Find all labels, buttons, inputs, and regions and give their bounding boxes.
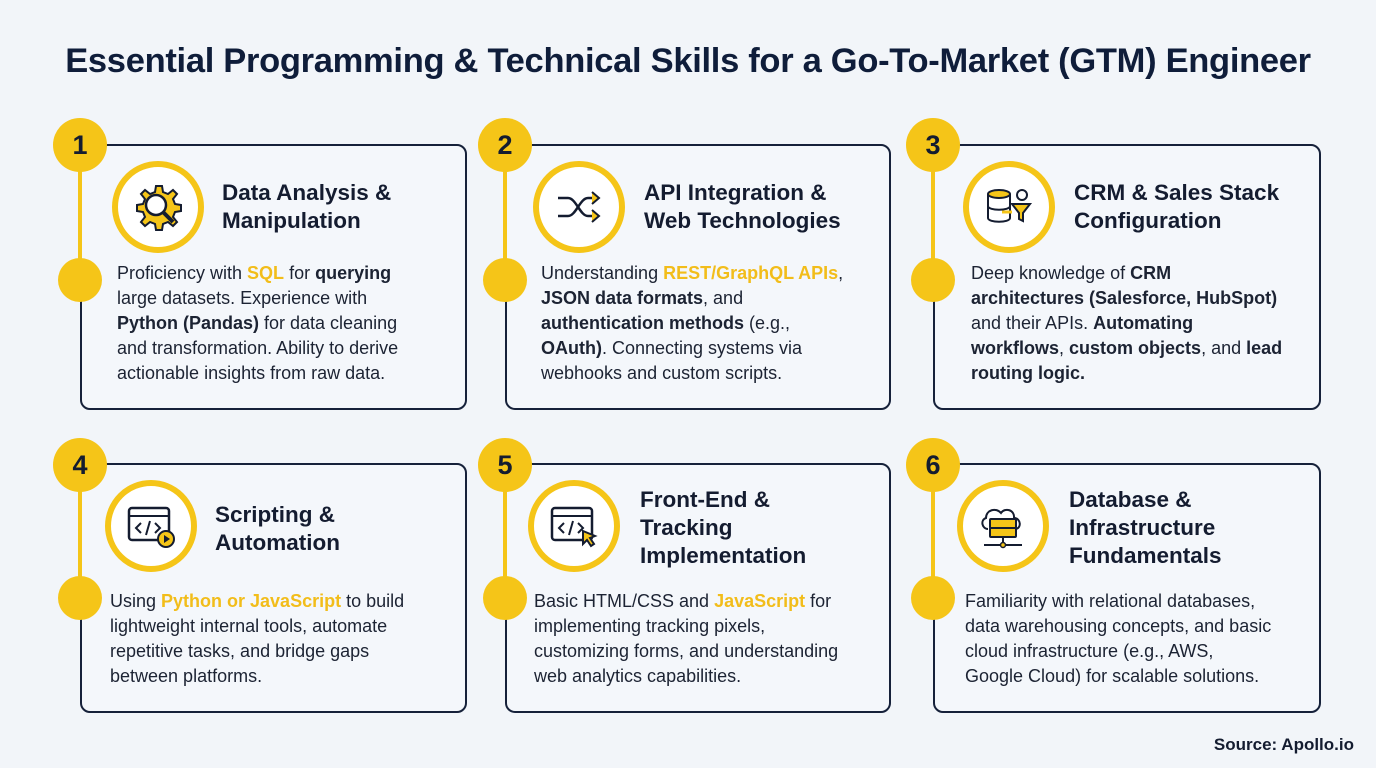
heading: Automation: [215, 530, 340, 555]
text: and transformation. Ability to derive: [117, 338, 398, 358]
number 4: 4: [72, 450, 88, 480]
text: [534, 591, 838, 686]
heading: [640, 487, 806, 568]
heading: Tracking: [640, 515, 733, 540]
heading: CRM & Sales Stack: [1074, 180, 1279, 205]
heading: API Integration &: [644, 180, 827, 205]
text: Google Cloud) for scalable solutions.: [965, 666, 1259, 686]
icon: cloud server: [957, 480, 1049, 572]
text: [971, 263, 1282, 383]
text: routing logic.: [971, 363, 1085, 383]
heading: [222, 180, 391, 233]
heading: Manipulation: [222, 208, 361, 233]
number 2: 2: [497, 130, 513, 160]
text: webhooks and custom scripts.: [541, 363, 782, 383]
source: Source: Apollo.io: [1214, 735, 1354, 754]
text: authentication methods (e.g.,: [541, 313, 790, 333]
text: Proficiency with SQL for querying: [117, 263, 391, 283]
heading: Web Technologies: [644, 208, 841, 233]
text: [110, 591, 404, 686]
heading: Configuration: [1074, 208, 1221, 233]
heading: [1069, 487, 1222, 568]
heading: [644, 180, 841, 233]
heading: Front-End &: [640, 487, 770, 512]
text: large datasets. Experience with: [117, 288, 367, 308]
title: Essential Programming & Technical Skills for a Go-To-Market (GTM) Engineer: [65, 42, 1311, 80]
text: lightweight internal tools, automate: [110, 616, 387, 636]
icon: gear magnifier: [112, 161, 204, 253]
text: [541, 263, 843, 383]
heading: [215, 502, 340, 555]
text: and their APIs. Automating: [971, 313, 1193, 333]
heading: Infrastructure: [1069, 515, 1215, 540]
text: Using Python or JavaScript to build: [110, 591, 404, 611]
text: repetitive tasks, and bridge gaps: [110, 641, 369, 661]
text: OAuth). Connecting systems via: [541, 338, 802, 358]
text: customizing forms, and understanding: [534, 641, 838, 661]
number 5: [478, 438, 532, 492]
text: Deep knowledge of CRM: [971, 263, 1171, 283]
heading: Scripting &: [215, 502, 335, 527]
heading: Implementation: [640, 543, 806, 568]
text: cloud infrastructure (e.g., AWS,: [965, 641, 1213, 661]
number 1: [53, 118, 107, 172]
text: Basic HTML/CSS and JavaScript for: [534, 591, 831, 611]
heading: Data Analysis &: [222, 180, 391, 205]
icon: shuffle arrows: [533, 161, 625, 253]
panel: card 6: [906, 438, 1321, 713]
text: Understanding REST/GraphQL APIs,: [541, 263, 843, 283]
text: [965, 591, 1271, 686]
panel: card 2: [478, 118, 891, 410]
panel: card 4: [53, 438, 467, 713]
number 3: 3: [925, 130, 941, 160]
text: between platforms.: [110, 666, 262, 686]
text: Familiarity with relational databases,: [965, 591, 1255, 611]
number 5: 5: [497, 450, 513, 480]
text: actionable insights from raw data.: [117, 363, 385, 383]
number 4: [53, 438, 107, 492]
heading: Fundamentals: [1069, 543, 1222, 568]
text: workflows, custom objects, and lead: [971, 338, 1282, 358]
panel: card 5: [478, 438, 891, 713]
text: data warehousing concepts, and basic: [965, 616, 1271, 636]
panel: card 3: [906, 118, 1321, 410]
text: implementing tracking pixels,: [534, 616, 765, 636]
icon: database funnel: [963, 161, 1055, 253]
text: Python (Pandas) for data cleaning: [117, 313, 397, 333]
heading: [1074, 180, 1280, 233]
text: JSON data formats, and: [541, 288, 743, 308]
icon: code cursor: [528, 480, 620, 572]
number 1: 1: [72, 130, 88, 160]
number 3: [906, 118, 960, 172]
number 6: [906, 438, 960, 492]
text: [117, 263, 398, 383]
number 2: [478, 118, 532, 172]
icon: code window: [105, 480, 197, 572]
text: web analytics capabilities.: [534, 666, 741, 686]
text: architectures (Salesforce, HubSpot): [971, 288, 1277, 308]
panel: card 1: [53, 118, 467, 410]
number 6: 6: [925, 450, 941, 480]
heading: Database &: [1069, 487, 1192, 512]
